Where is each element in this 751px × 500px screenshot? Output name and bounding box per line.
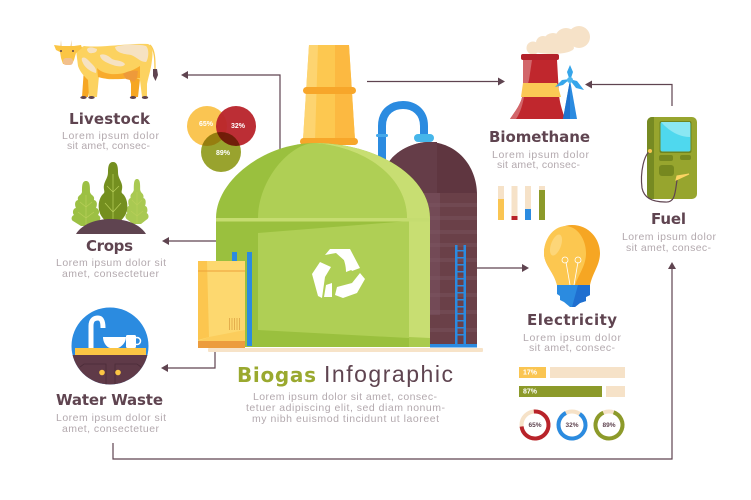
icon: fuel pump — [641, 117, 697, 202]
chart: donut charts: 32% — [565, 422, 579, 429]
blue pipe — [376, 105, 434, 166]
text: title body: my nibh euismod tincidunt ut laoreet — [252, 413, 439, 425]
title: Biogas — [237, 363, 316, 387]
icon: crops — [72, 162, 149, 234]
heading: biomethane: Biomethane — [489, 128, 590, 146]
chart: donut charts: 89% — [602, 422, 616, 429]
text: fuel body — [622, 231, 716, 254]
brown tank — [387, 142, 477, 347]
arrow: tank to electricity — [477, 264, 529, 272]
text: livestock body: sit amet, consec- — [67, 140, 150, 152]
arrow: digester to crops — [162, 237, 216, 245]
text: crops body: Lorem ipsum dolor sit — [56, 257, 166, 269]
heading: livestock: Livestock — [69, 110, 151, 128]
chart: vertical bars — [498, 186, 545, 220]
icon: water waste sink — [70, 308, 150, 387]
text: biomethane body — [492, 149, 590, 171]
chart: horizontal bars: 17% — [523, 370, 538, 376]
text: title body — [246, 391, 446, 425]
chart: donut charts: 65% — [528, 422, 542, 429]
text: title body: Lorem ipsum dolor sit amet, consec- — [253, 391, 438, 403]
arrow: water waste to fuel — [113, 262, 676, 459]
text: livestock body — [62, 130, 160, 152]
chart: venn diagram: 65% — [199, 121, 214, 128]
text: fuel body: sit amet, consec- — [626, 242, 712, 254]
icon: recycle symbol — [312, 249, 365, 298]
text: title body: tetuer adipiscing elit, sed diam nonum- — [246, 402, 446, 414]
arrow: chimney to biomethane — [367, 78, 505, 86]
text: biomethane body: Lorem ipsum dolor — [492, 149, 590, 161]
text: electricity body: Lorem ipsum dolor — [523, 332, 622, 344]
heading: crops: Crops — [86, 237, 133, 255]
heading: electricity: Electricity — [527, 311, 617, 329]
chart: venn diagram: 32% — [231, 123, 246, 130]
title: Infographic — [324, 361, 453, 387]
arrow: box to water waste — [161, 352, 215, 372]
text: electricity body: sit amet, consec- — [529, 342, 616, 354]
blue side rails — [232, 252, 252, 346]
icon: light bulb — [544, 225, 600, 307]
icon: wind turbine — [555, 65, 584, 119]
icon: biomethane tower with smoke — [510, 26, 590, 119]
title — [237, 361, 453, 387]
floor — [208, 348, 483, 352]
icon: cow — [54, 40, 158, 99]
text: crops body: amet, consectetuer — [62, 268, 160, 280]
illustration: biogas plant — [198, 45, 483, 352]
text: crops body — [56, 257, 166, 280]
green dome — [216, 143, 430, 347]
text: biomethane body: sit amet, consec- — [497, 159, 580, 171]
yellow box — [198, 261, 245, 348]
ladder — [430, 245, 477, 348]
text: water waste body: Lorem ipsum dolor sit — [56, 412, 166, 424]
heading: water waste: Water Waste — [56, 391, 163, 409]
text: electricity body — [523, 332, 622, 354]
chart: horizontal bars — [519, 367, 625, 397]
text: livestock body: Lorem ipsum dolor — [62, 130, 160, 142]
chart: horizontal bars: 87% — [523, 388, 538, 396]
text: water waste body: amet, consectetuer — [62, 423, 160, 435]
text: water waste body — [56, 412, 166, 435]
arrow: digester to livestock — [181, 71, 280, 153]
chart: venn diagram — [187, 106, 256, 172]
chimney — [300, 45, 358, 145]
text: fuel body: Lorem ipsum dolor — [622, 231, 716, 243]
arrow: fuel to biomethane — [585, 80, 672, 106]
chart: venn diagram: 89% — [216, 150, 231, 157]
heading: fuel: Fuel — [651, 210, 686, 228]
chart: donut charts — [520, 406, 626, 444]
